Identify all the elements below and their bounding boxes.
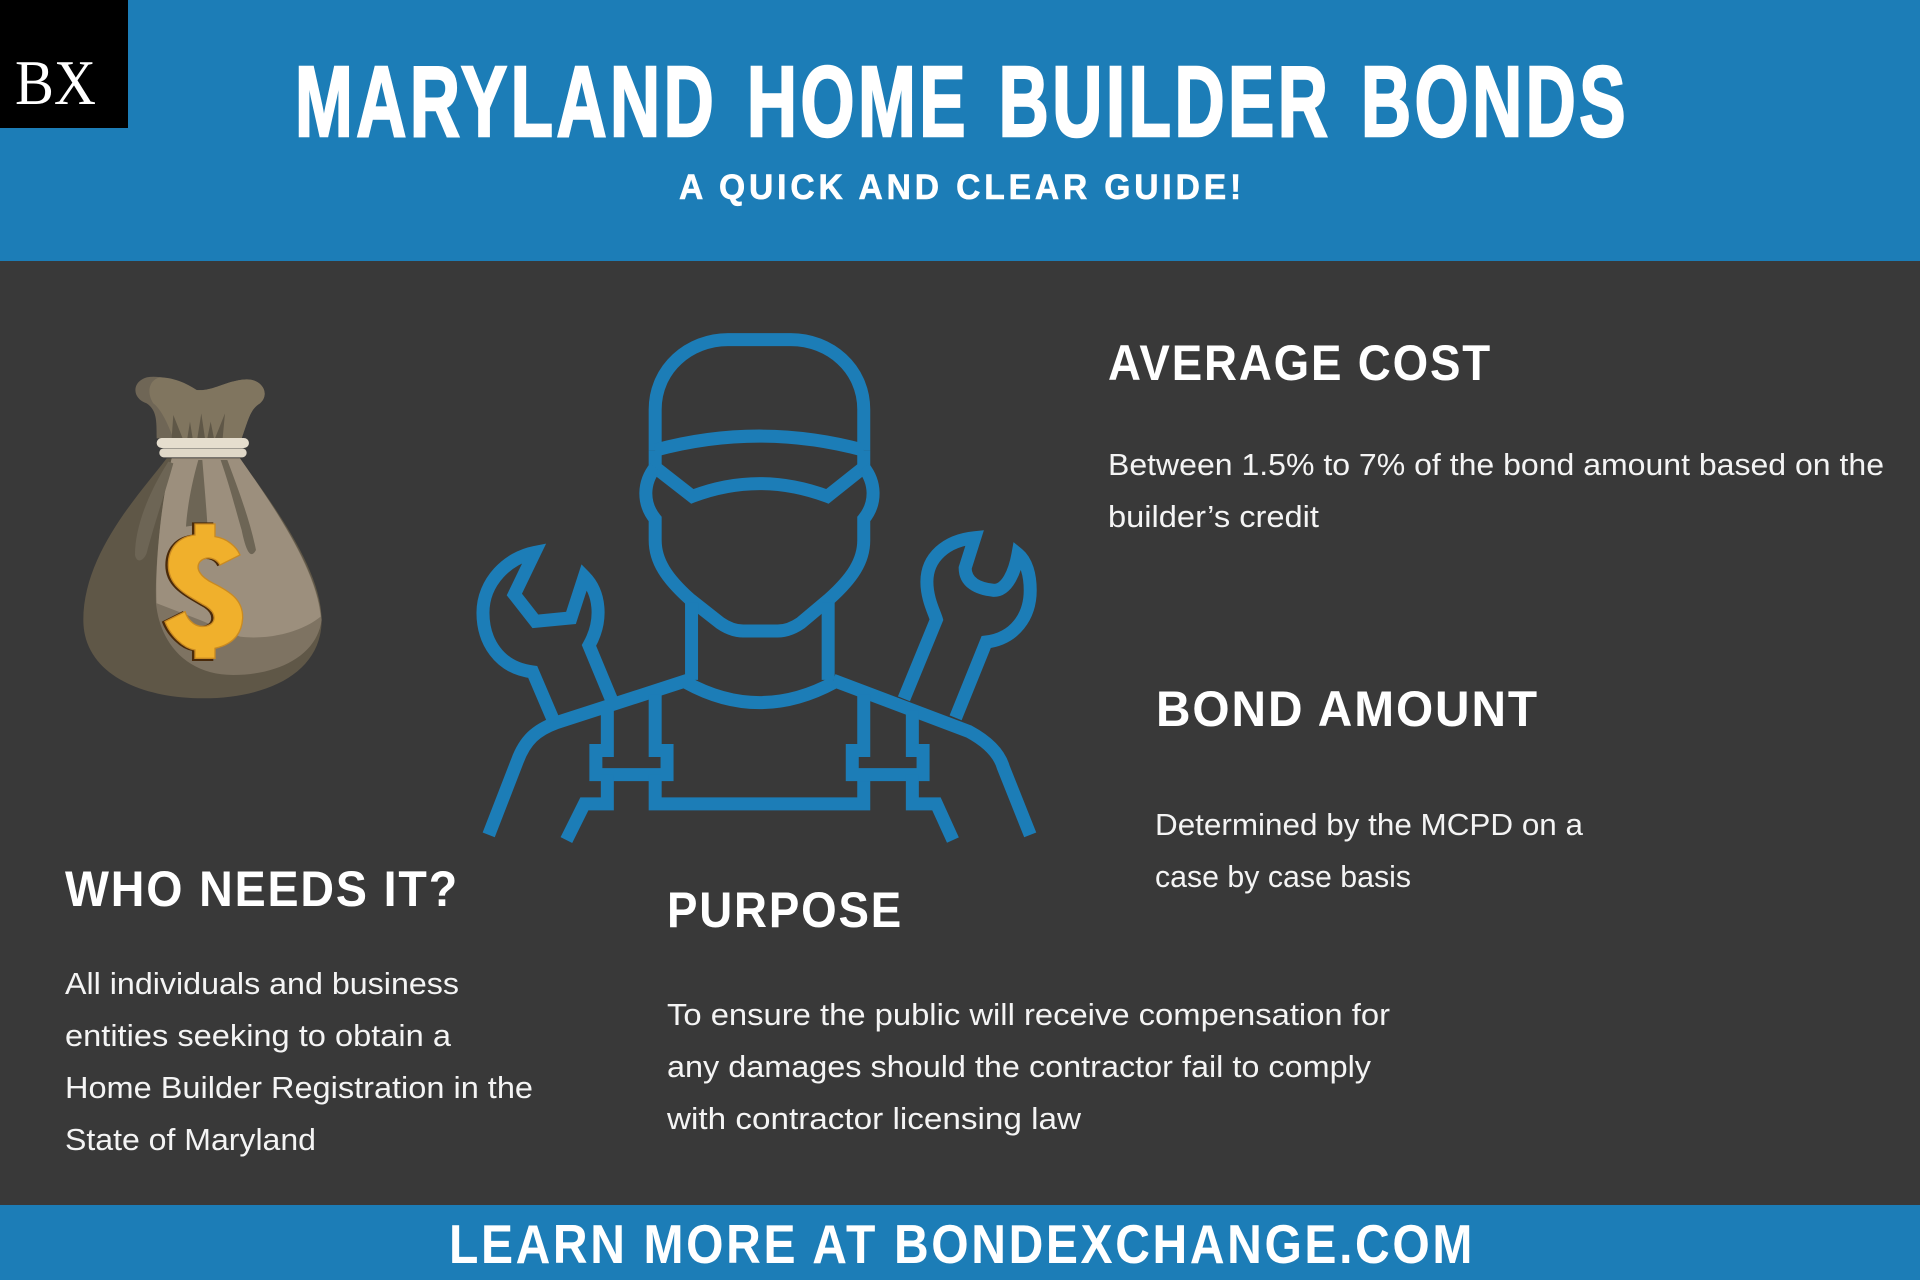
section: bond amount bbox=[1155, 681, 1584, 894]
section: bond amount: Determined by the MCPD on a bbox=[1155, 807, 1584, 842]
section: bond amount: case by case basis bbox=[1155, 859, 1411, 894]
footer banner bbox=[0, 1205, 1920, 1280]
section: who needs it bbox=[65, 861, 533, 1157]
footer banner: LEARN MORE AT BONDEXCHANGE.COM bbox=[449, 1213, 1475, 1275]
logo: BX: BX bbox=[15, 47, 96, 118]
section: bond amount: BOND AMOUNT bbox=[1156, 681, 1539, 737]
section: average cost: Between 1.5% to 7% of the bond amount based on the bbox=[1108, 447, 1884, 482]
face and neck bbox=[646, 467, 873, 703]
section: who needs it: WHO NEEDS IT? bbox=[65, 861, 459, 917]
icon: money bag bbox=[83, 377, 322, 698]
shoulders and overalls bbox=[489, 680, 1030, 840]
section: purpose: PURPOSE bbox=[667, 882, 903, 938]
section: purpose: any damages should the contractor fail to comply bbox=[667, 1049, 1372, 1084]
logo: BX bbox=[0, 0, 128, 128]
left wrench bbox=[483, 552, 611, 721]
section: average cost: AVERAGE COST bbox=[1108, 335, 1492, 391]
section: average cost bbox=[1108, 335, 1884, 534]
section: average cost: builder’s credit bbox=[1108, 499, 1319, 534]
icon: worker with wrenches bbox=[483, 340, 1030, 840]
header banner bbox=[0, 0, 1920, 261]
section: purpose bbox=[666, 882, 1390, 1136]
section: purpose: with contractor licensing law bbox=[666, 1101, 1082, 1136]
section: who needs it: entities seeking to obtain a bbox=[65, 1018, 452, 1053]
section: purpose: To ensure the public will receive compensation for bbox=[667, 997, 1390, 1032]
subtitle: A QUICK AND CLEAR GUIDE! bbox=[679, 168, 1245, 207]
cap bbox=[655, 340, 864, 496]
section: who needs it: State of Maryland bbox=[65, 1122, 316, 1157]
right wrench bbox=[904, 538, 1030, 718]
section: who needs it: All individuals and business bbox=[65, 966, 459, 1001]
dollar sign bbox=[163, 523, 243, 660]
section: who needs it: Home Builder Registration in the bbox=[65, 1070, 533, 1105]
